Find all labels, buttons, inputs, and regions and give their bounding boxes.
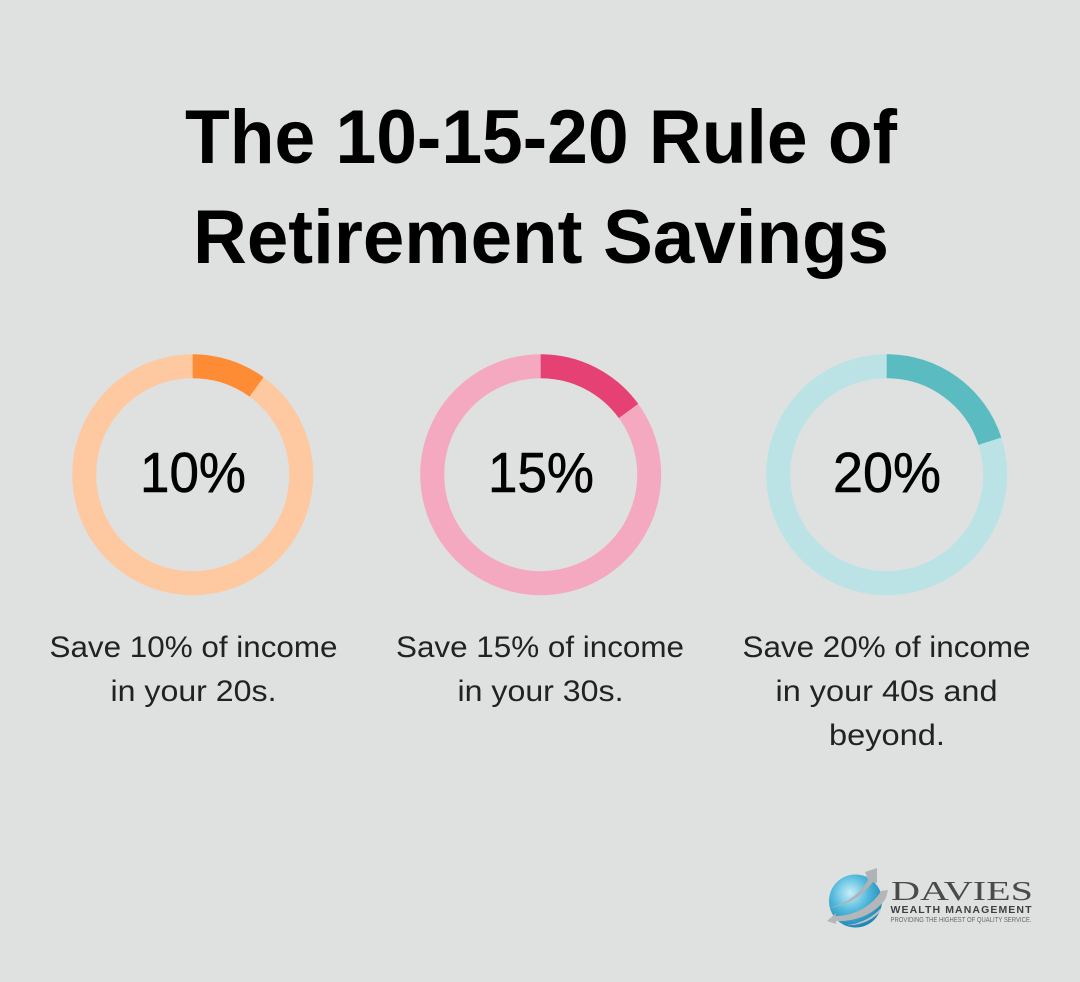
value: 20%: 20% — [833, 441, 941, 505]
title: Retirement Savings — [193, 195, 889, 280]
logo: Davies Wealth Management — [827, 868, 1033, 928]
panel: 10 percent — [50, 366, 338, 708]
value: 15%: 15% — [488, 441, 594, 505]
description: 10%: in your 20s. — [110, 675, 276, 708]
panel: 15 percent — [396, 366, 684, 708]
panel: 20 percent — [742, 366, 1030, 752]
description: 20%: Save 20% of income — [742, 631, 1030, 664]
donut chart: 10% — [84, 366, 301, 583]
description: 10%: Save 10% of income — [50, 631, 338, 664]
title — [185, 95, 898, 280]
icon: globe with arrows — [827, 868, 888, 928]
wordmark: DAVIES: DAVIES — [891, 876, 1033, 906]
description: 15% — [396, 631, 684, 708]
value: 10%: 10% — [140, 441, 246, 505]
description: 20%: beyond. — [829, 719, 945, 752]
wordmark: Wealth Management: WEALTH MANAGEMENT — [890, 904, 1032, 916]
title: The 10-15-20 Rule of — [185, 95, 898, 180]
tagline: PROVIDING THE HIGHEST OF QUALITY SERVICE. — [890, 917, 1032, 924]
description: 20% — [742, 631, 1030, 752]
description: 15%: in your 30s. — [458, 675, 624, 708]
description: 15%: Save 15% of income — [396, 631, 684, 664]
donut chart: 15% — [432, 366, 649, 583]
donut chart: 20% — [778, 366, 995, 583]
description: 10% — [50, 631, 338, 708]
description: 20%: in your 40s and — [776, 675, 998, 708]
